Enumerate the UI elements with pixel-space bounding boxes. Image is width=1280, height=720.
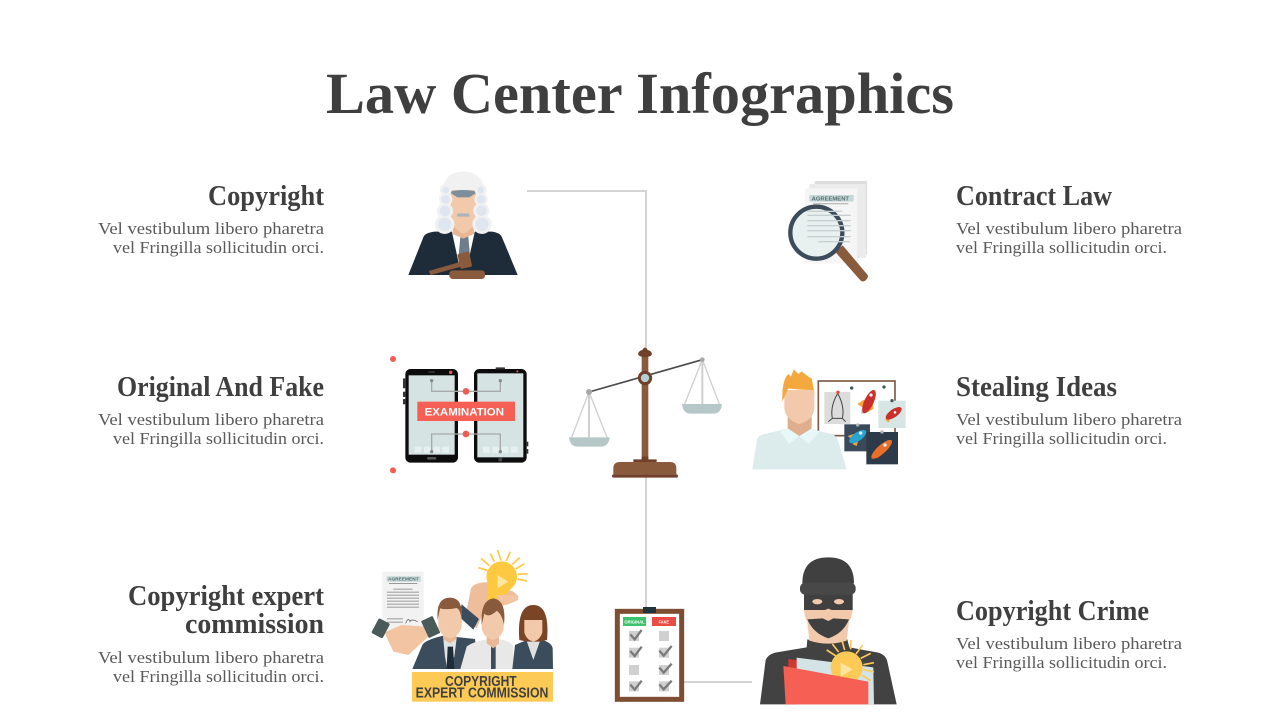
icon: clipboard checklist — [617, 607, 682, 699]
title: Law Center Infographics — [326, 61, 954, 126]
icon: examination phones: EXAMINATION — [425, 407, 504, 419]
icon: examination phones — [390, 356, 528, 473]
icon: clipboard checklist: ORIGINAL — [624, 619, 645, 624]
icon: judge with gavel — [408, 171, 518, 279]
text block: Contract Law: Contract Law — [956, 181, 1113, 212]
text block: Copyright Crime: Vel vestibulum libero pharetra — [956, 634, 1182, 653]
text block: Stealing Ideas: Vel vestibulum libero pharetra — [956, 410, 1182, 429]
icon: copyright expert commission team: EXPERT COMMISSION — [416, 686, 548, 702]
icon: agreement under magnifying glass: AGREEMENT — [812, 196, 850, 202]
text block: Contract Law: vel Fringilla sollicitudin orci. — [956, 238, 1167, 257]
icon: man with stolen rocket ideas — [752, 369, 906, 469]
text block: Copyright: Vel vestibulum libero pharetra — [98, 219, 324, 238]
text block: Original And Fake: Vel vestibulum libero pharetra — [98, 410, 324, 429]
text block: Contract Law: Vel vestibulum libero pharetra — [956, 219, 1182, 238]
icon: agreement under magnifying glass — [790, 181, 868, 282]
text block: Copyright Crime: vel Fringilla sollicitudin orci. — [956, 653, 1167, 672]
text block: Original And Fake: Original And Fake — [117, 372, 324, 403]
text block: Copyright expert commission: vel Fringilla sollicitudin orci. — [113, 667, 324, 686]
text block: Stealing Ideas: vel Fringilla sollicitudin orci. — [956, 429, 1167, 448]
icon: copyright expert commission team: AGREEMENT — [388, 577, 419, 582]
text block: Contract Law — [956, 181, 1182, 257]
text block: Original And Fake: vel Fringilla sollicitudin orci. — [113, 429, 324, 448]
text block: Copyright expert commission: Copyright expert — [128, 581, 325, 612]
icon: clipboard checklist: FAKE — [659, 619, 669, 624]
text block: Original And Fake — [98, 372, 324, 448]
icon: copyright expert commission team: COPYRIGHT — [445, 674, 517, 690]
text block: Stealing Ideas: Stealing Ideas — [956, 372, 1117, 403]
text block: Copyright expert commission — [98, 581, 325, 686]
text block: Copyright expert commission: Vel vestibulum libero pharetra — [98, 648, 324, 667]
text block: Copyright expert commission: commission — [185, 609, 324, 640]
text block: Stealing Ideas — [956, 372, 1182, 448]
icon: balance scale — [569, 348, 722, 478]
icon: copyright expert commission team — [371, 550, 553, 702]
text block: Copyright: Copyright — [208, 181, 325, 212]
text block: Copyright Crime — [956, 596, 1182, 672]
text block: Copyright — [98, 181, 325, 257]
icon: masked thief with folder — [760, 557, 897, 704]
text block: Copyright Crime: Copyright Crime — [956, 596, 1149, 627]
text block: Copyright: vel Fringilla sollicitudin orci. — [113, 238, 324, 257]
